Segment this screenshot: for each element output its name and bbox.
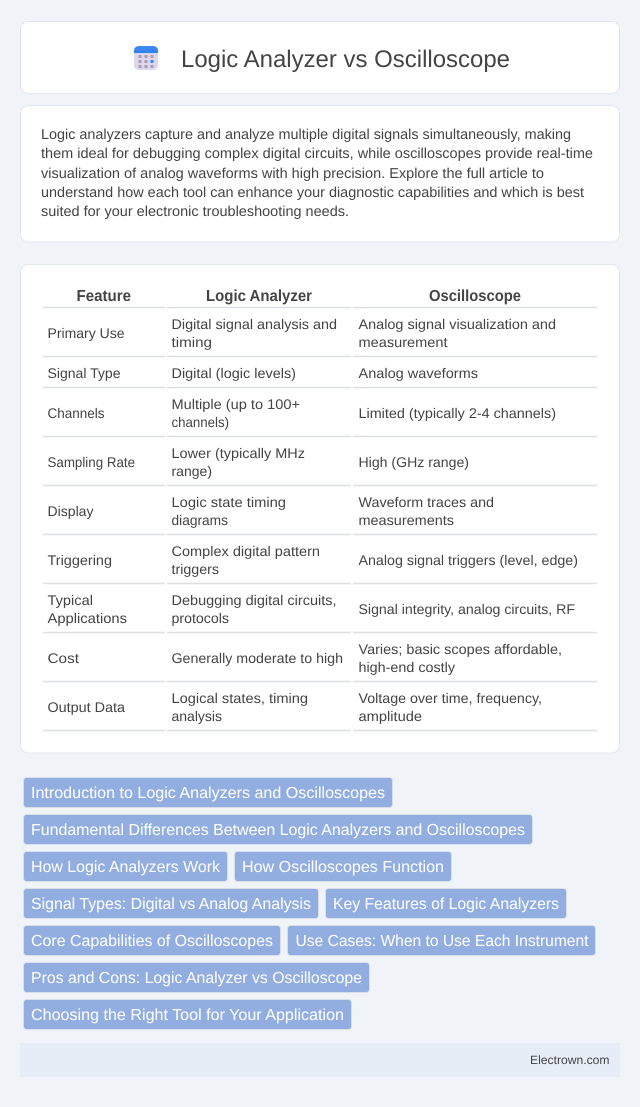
row: output data: amplitude bbox=[358, 708, 422, 724]
row: primary use: Primary Use bbox=[48, 325, 125, 341]
row: primary use bbox=[48, 316, 556, 350]
tag: introduction bbox=[24, 778, 392, 808]
row: display bbox=[48, 494, 494, 528]
row: display: Logic state timing bbox=[172, 494, 286, 510]
row: display: measurements bbox=[358, 512, 454, 528]
row: channels: Channels bbox=[48, 405, 104, 421]
row: cost bbox=[48, 641, 562, 675]
row: triggering: Complex digital pattern bbox=[172, 543, 320, 559]
tag: pros and cons bbox=[24, 962, 370, 992]
row: channels: Multiple (up to 100+ bbox=[172, 396, 300, 412]
row: display: diagrams bbox=[172, 512, 228, 528]
tag: introduction: Introduction to Logic Analyzers and Oscilloscopes bbox=[31, 785, 385, 802]
row: triggering bbox=[48, 543, 578, 577]
row: sampling rate: Lower (typically MHz bbox=[172, 445, 305, 461]
row: triggering: Analog signal triggers (level, edge) bbox=[358, 552, 578, 568]
panel: comparison table bbox=[20, 264, 620, 753]
row: channels: Limited (typically 2-4 channels) bbox=[358, 405, 556, 421]
row: sampling rate: Sampling Rate bbox=[48, 454, 135, 470]
row: primary use: measurement bbox=[358, 334, 448, 350]
row: output data: Output Data bbox=[48, 699, 125, 715]
row: primary use: Analog signal visualization and bbox=[358, 316, 556, 332]
row: sampling rate bbox=[48, 445, 469, 479]
row: cost: Generally moderate to high bbox=[172, 650, 343, 666]
tag: pros and cons: Pros and Cons: Logic Analyzer vs Oscilloscope bbox=[31, 970, 362, 987]
tag: how oscilloscopes function bbox=[234, 852, 452, 882]
row: cost: Cost bbox=[48, 650, 79, 666]
tag: core capabilities: Core Capabilities of Oscilloscopes bbox=[31, 933, 273, 950]
row: output data: Voltage over time, frequency, bbox=[358, 690, 542, 706]
text block: introduction: them ideal for debugging complex digital circuits, while oscilloscopes provide real-time bbox=[41, 146, 593, 162]
row: cost: high-end costly bbox=[358, 659, 455, 675]
text block: introduction: Logic analyzers capture and analyze multiple digital signals simultaneously, making bbox=[41, 127, 571, 143]
row: typical applications: Debugging digital circuits, bbox=[172, 592, 336, 608]
text block: introduction: suited for your electronic troubleshooting needs. bbox=[41, 204, 349, 220]
text block: introduction bbox=[41, 127, 593, 220]
row: typical applications: Applications bbox=[48, 610, 127, 626]
tag: signal types bbox=[24, 888, 318, 918]
row: typical applications bbox=[48, 592, 575, 626]
table header bbox=[76, 288, 521, 305]
tag: fundamental differences: Fundamental Differences Between Logic Analyzers and Oscilloscopes bbox=[31, 822, 525, 839]
row: typical applications: Signal integrity, analog circuits, RF bbox=[358, 601, 575, 617]
row: primary use: Digital signal analysis and bbox=[172, 316, 337, 332]
panel: topic tags bbox=[24, 778, 596, 1030]
row: primary use: timing bbox=[172, 334, 212, 350]
row: display: Display bbox=[48, 503, 94, 519]
row: output data bbox=[48, 690, 542, 724]
tag: choosing the right tool: Choosing the Right Tool for Your Application bbox=[31, 1007, 344, 1024]
row: signal type: Digital (logic levels) bbox=[172, 365, 296, 381]
row: typical applications: protocols bbox=[172, 610, 229, 626]
row: triggering: triggers bbox=[172, 561, 219, 577]
tag: key features bbox=[326, 888, 566, 918]
row: cost: Varies; basic scopes affordable, bbox=[358, 641, 562, 657]
panel: header bbox=[20, 22, 620, 94]
footer bbox=[20, 1043, 620, 1077]
row: signal type: Signal Type bbox=[48, 365, 121, 381]
row: channels: channels) bbox=[172, 414, 229, 430]
icon: calendar grid bbox=[134, 46, 158, 70]
tag: choosing the right tool bbox=[24, 1000, 352, 1030]
table header: Logic Analyzer bbox=[206, 288, 312, 305]
row: typical applications: Typical bbox=[48, 592, 93, 608]
tag: key features: Key Features of Logic Analyzers bbox=[333, 896, 559, 913]
text block: introduction: visualization of analog waveforms with high precision. Explore the full article to bbox=[41, 166, 544, 182]
tag: fundamental differences bbox=[24, 814, 532, 844]
row: display: Waveform traces and bbox=[358, 494, 494, 510]
footer: Electrown.com bbox=[530, 1053, 610, 1067]
row: signal type: Analog waveforms bbox=[358, 365, 478, 381]
row: output data: analysis bbox=[172, 708, 222, 724]
table header: Feature bbox=[76, 288, 131, 305]
tag: use cases bbox=[288, 926, 596, 956]
tag: how logic analyzers work: How Logic Analyzers Work bbox=[31, 859, 221, 876]
tag: signal types: Signal Types: Digital vs Analog Analysis bbox=[31, 896, 311, 913]
tag: use cases: Use Cases: When to Use Each Instrument bbox=[296, 933, 589, 950]
row: triggering: Triggering bbox=[48, 552, 112, 568]
row: sampling rate: range) bbox=[172, 463, 212, 479]
row: sampling rate: High (GHz range) bbox=[358, 454, 469, 470]
row: output data: Logical states, timing bbox=[172, 690, 308, 706]
table header: Oscilloscope bbox=[429, 288, 521, 305]
tag: core capabilities bbox=[24, 926, 280, 956]
text block: introduction: understand how each tool can enhance your diagnostic capabilities and which is best bbox=[41, 185, 584, 201]
row: channels bbox=[48, 396, 556, 430]
title: Logic Analyzer vs Oscilloscope bbox=[181, 46, 510, 73]
tag: how oscilloscopes function: How Oscilloscopes Function bbox=[242, 859, 444, 876]
panel: introduction bbox=[20, 106, 620, 242]
tag: how logic analyzers work bbox=[24, 852, 228, 882]
row: signal type bbox=[48, 365, 478, 381]
